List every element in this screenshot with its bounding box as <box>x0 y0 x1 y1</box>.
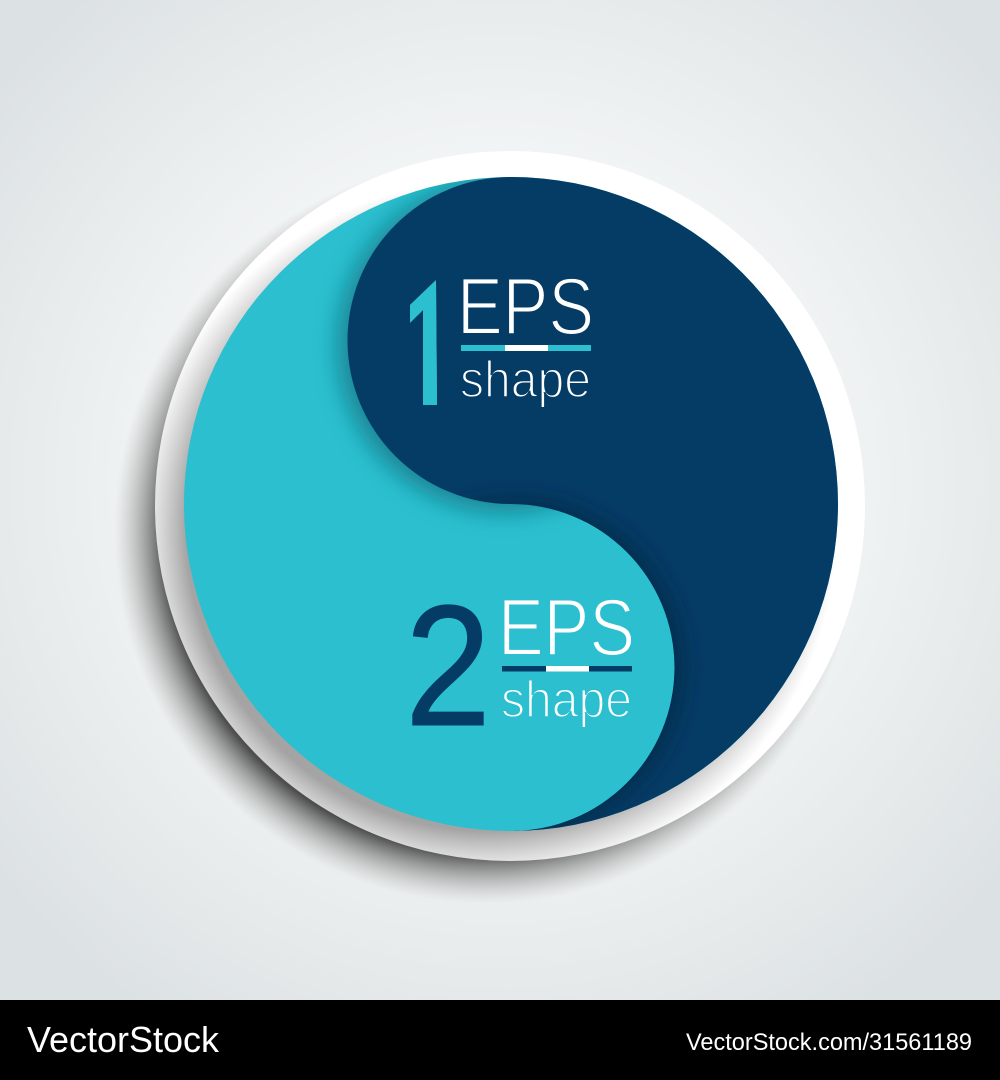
heading: EPS 1: EPS <box>457 262 594 352</box>
number 2: 2 <box>405 570 491 762</box>
watermark url text: VectorStock.com/31561189 <box>686 1029 972 1056</box>
subheading: shape 1: shape <box>460 351 591 409</box>
subheading: shape 2: shape <box>501 671 632 729</box>
white ring <box>137 151 865 880</box>
tricolour bar 2 <box>502 666 632 672</box>
segment 1: navy shape <box>348 177 838 831</box>
label block 2 <box>405 570 635 762</box>
watermark bar <box>0 1000 1000 1080</box>
heading: EPS 2: EPS <box>498 583 635 673</box>
number 1: 1 <box>376 244 475 443</box>
yin-yang diagram <box>184 177 838 837</box>
shadow of teal lobe on navy <box>472 494 688 831</box>
outer drop shadow <box>114 160 858 904</box>
watermark logo text: VectorStock <box>27 1019 220 1060</box>
tricolour bar 1 <box>461 345 591 351</box>
segment 2: teal base circle <box>184 177 838 831</box>
label block 1 <box>410 278 591 407</box>
shadow of navy lobe on teal <box>326 177 564 524</box>
